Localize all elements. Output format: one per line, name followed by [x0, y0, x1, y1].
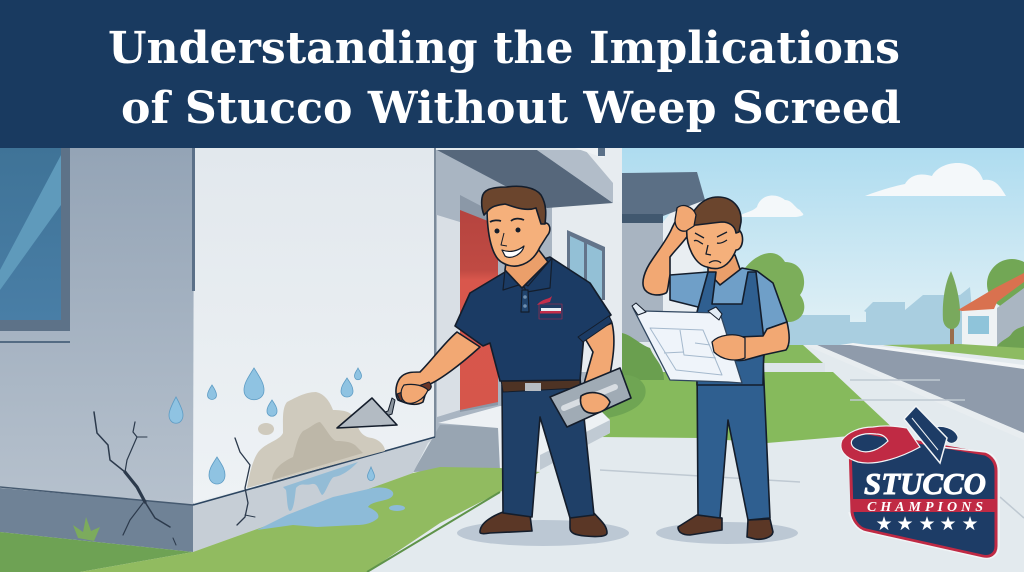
- title: [108, 23, 901, 134]
- hand on blueprint: [712, 335, 745, 360]
- entry steps: [413, 406, 610, 472]
- five stars: ★: [896, 513, 914, 535]
- smile: [502, 246, 524, 257]
- brand subtitle CHAMPIONS: CHAMPIONS: [867, 500, 983, 515]
- left window: [0, 148, 70, 343]
- grass main: [80, 467, 540, 572]
- sleeve: [578, 316, 612, 342]
- collar and placket: [503, 258, 552, 312]
- red swoosh: [841, 426, 920, 463]
- plastering float: [550, 368, 631, 427]
- five stars: ★: [918, 513, 936, 535]
- far grass strip: [883, 344, 1024, 360]
- building entrance: [435, 148, 622, 440]
- tuft: [73, 517, 100, 541]
- five stars: [875, 513, 979, 535]
- trowel handle: [397, 382, 431, 401]
- right wall: [193, 148, 435, 503]
- sad features: [694, 232, 727, 263]
- tree behind neighborhood house: [987, 259, 1024, 309]
- cracks: [94, 412, 255, 545]
- neck: [708, 255, 741, 285]
- clouds: [737, 163, 1006, 217]
- boots: [678, 515, 773, 539]
- trowel: [337, 398, 397, 428]
- red banner: [853, 499, 995, 512]
- arm raised to head: [643, 212, 695, 295]
- hair: [482, 186, 546, 224]
- five stars: ★: [961, 513, 979, 535]
- lawn: upper: [755, 345, 823, 363]
- bush beside building: [600, 333, 664, 380]
- upper railing window: [575, 148, 604, 158]
- shoes: [480, 512, 607, 537]
- blue tee: [670, 268, 787, 365]
- hand on float: [580, 393, 610, 413]
- background: sidewalk ground: [330, 340, 1024, 572]
- face: [487, 195, 550, 266]
- foundation: left: [0, 487, 193, 552]
- left wall: [0, 148, 194, 505]
- neighbor house: [622, 172, 705, 342]
- right house: [958, 273, 1024, 352]
- bush under trowel: [590, 375, 646, 420]
- sidewalk seam above lawn: [755, 363, 825, 372]
- road: [805, 343, 1024, 440]
- lawn: lower: [600, 372, 897, 443]
- sidewalk seams: [600, 380, 1024, 518]
- water puddle: [257, 487, 405, 530]
- five stars: ★: [939, 513, 957, 535]
- worker with trowel: [337, 186, 631, 546]
- hand on handle fingers: [401, 384, 428, 403]
- blueprint: [632, 303, 742, 383]
- face: [687, 212, 743, 269]
- right arm: [713, 322, 789, 360]
- five stars: ★: [875, 513, 893, 535]
- navy polo shirt: [455, 257, 611, 381]
- grass left: [0, 532, 193, 572]
- neck: [505, 245, 548, 288]
- header band: [0, 0, 1024, 148]
- grass lower edge: [367, 492, 500, 572]
- left arm with hand: [396, 332, 480, 404]
- water drips: [283, 462, 358, 511]
- tall cypress tree: [943, 271, 960, 345]
- balcony side: [537, 150, 613, 203]
- title line 2: of Stucco Without Weep Screed: [121, 83, 901, 134]
- brand name STUCCO: STUCCO: [864, 466, 986, 501]
- ground shadow: [457, 520, 629, 546]
- worried homeowner with blueprint: [632, 197, 798, 544]
- entry window: [567, 230, 605, 300]
- red door: [460, 210, 498, 410]
- overalls legs: [697, 360, 770, 520]
- water drops: [169, 368, 374, 484]
- stucco champions logo: [841, 406, 999, 558]
- shield: [850, 432, 996, 557]
- eyes and brows: [490, 219, 524, 246]
- belt: [501, 376, 580, 392]
- hand on head: [675, 206, 696, 231]
- shirt logo: [537, 296, 562, 319]
- ground shadow: [656, 522, 798, 544]
- door frame: [460, 195, 498, 412]
- foundation: right: [193, 437, 435, 552]
- shield white outline: [849, 447, 999, 558]
- title line 1: Understanding the Implications: [108, 23, 900, 74]
- balcony overhang: [437, 150, 613, 208]
- stain: damaged stucco: [247, 392, 385, 488]
- background: sky: [622, 148, 1024, 358]
- navy trousers: [502, 378, 594, 518]
- trowel emblem: [904, 406, 958, 463]
- overalls bib: [697, 272, 764, 385]
- bush behind worried man: [745, 253, 804, 322]
- hair: [687, 197, 741, 233]
- distant skyline: [785, 287, 975, 345]
- right arm: [580, 323, 614, 407]
